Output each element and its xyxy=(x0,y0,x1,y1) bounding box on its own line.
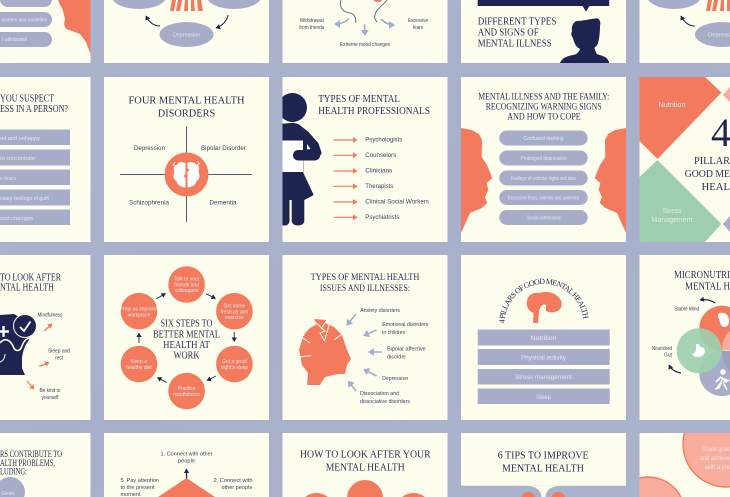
panel: six steps to better mental health at work: Talk to your xyxy=(174,276,200,282)
panel: mental illness and the family: RECOGNIZING WARNING SIGNS xyxy=(486,102,602,112)
panel: 4 pillars of good mental health: Nutrition xyxy=(658,102,686,109)
panel: different types and signs of mental illness: DIFFERENT TYPES xyxy=(478,16,556,27)
panel: what to do if you suspect mental illness: od and unhappy xyxy=(0,136,40,142)
panel: warning signs fragment top left: l withdrawal xyxy=(2,37,27,43)
panel: types of mental health professionals: Counselors xyxy=(365,152,397,159)
panel: types of mental health issues and illnesses: Dissociation and xyxy=(360,391,399,397)
panel: six steps to better mental health at work: HEALTH AT xyxy=(163,340,210,351)
panel: factors contributing to mental health problems fragment: RS CONTRIBUTE TO xyxy=(0,449,62,459)
panel: six steps to better mental health at work: Get some xyxy=(224,304,245,310)
panel: mental illness and the family: Confused thinking xyxy=(524,136,564,142)
panel: what to do if you suspect mental illness xyxy=(0,77,90,242)
panel: how to look after mental health fragment: NTAL HEALTH xyxy=(0,282,54,294)
panel: types of mental health professionals: Clinical Social Workers xyxy=(365,199,430,206)
panel: signs of mood fragment xyxy=(282,0,448,63)
panel: six steps to better mental health at work: exercise xyxy=(225,315,244,321)
panel: types of mental health issues and illnesses: Anxiety disorders xyxy=(360,308,400,314)
panel: 6 tips to improve mental health: 6 TIPS TO IMPROVE xyxy=(498,450,589,462)
panel: types of mental health issues and illnesses: disorder xyxy=(387,354,406,360)
panel: six steps to better mental health at work: healthy diet xyxy=(126,365,152,371)
panel: signs of mood fragment: Excessive xyxy=(408,18,428,24)
panel: six steps to better mental health at work: workplace xyxy=(128,312,150,318)
panel: six steps to better mental health at work: friends and xyxy=(174,282,199,288)
panel: five ways to wellbeing: to the present xyxy=(120,485,155,491)
panel: six steps to better mental health at work: night's sleep xyxy=(221,365,248,371)
panel: six steps to better mental health at work: Help us improve xyxy=(121,306,157,312)
panel: four mental health disorders: Schizophrenia xyxy=(129,200,169,206)
panel: types of mental health professionals: TYPES OF MENTAL xyxy=(318,94,400,105)
panel: 4 pillars arc title: Sleep xyxy=(536,394,551,401)
panel: signs of mood fragment: fears xyxy=(413,25,423,31)
panel: mental illness and the family xyxy=(461,77,626,242)
panel: depression cycle fragment right xyxy=(640,0,730,63)
panel: six steps to better mental health at work xyxy=(104,255,269,420)
panel: types of mental health issues and illnesses: Depression xyxy=(382,376,408,382)
panel: warning signs fragment top left: , worries and anxieties xyxy=(0,18,47,24)
panel: 6 tips to improve mental health: MENTAL HEALTH xyxy=(502,462,584,474)
panel: micronutrients and mental health: Nourished xyxy=(652,346,672,352)
panel: mental illness and the family: Excessive fears, worries and anxieties xyxy=(508,196,579,202)
panel: types of mental health issues and illnesses: ISSUES AND ILLNESSES: xyxy=(320,284,410,294)
panel: mental illness and the family: Feelings of extreme highs and lows xyxy=(511,176,576,182)
panel: types of mental health professionals: Clinicians xyxy=(365,168,393,175)
panel: mental illness and the family: Social withdrawal xyxy=(526,216,560,222)
panel: six steps to better mental health at work: Keep a xyxy=(131,359,147,365)
panel: micronutrients and mental health: Gut xyxy=(664,352,673,358)
panel: how to look after mental health fragment: yourself xyxy=(42,395,59,401)
panel: 4 pillars arc title: Physical activity xyxy=(521,354,567,362)
panel: how to look after your mental health: MENTAL HEALTH xyxy=(326,462,405,474)
panel: four mental health disorders: FOUR MENTAL HEALTH xyxy=(128,96,245,106)
panel: four mental health disorders: DISORDERS xyxy=(158,108,215,120)
panel: what to do if you suspect mental illness: ro concentrate xyxy=(0,156,35,162)
panel: types of mental health issues and illnesses: Emotional disorders xyxy=(382,322,429,328)
panel: five ways to wellbeing: people xyxy=(178,458,195,464)
panel: types of mental health professionals: Psychiatrists xyxy=(365,214,400,221)
panel: six steps to better mental health at work: SIX STEPS TO xyxy=(160,318,212,329)
panel: what to do if you suspect mental illness: ssary feelings of guilt xyxy=(0,196,49,202)
panel: factors contributing to mental health problems fragment: LUDING: xyxy=(0,466,27,476)
panel: five ways to wellbeing: other people xyxy=(222,485,252,491)
panel: four mental health disorders: Depression xyxy=(134,145,165,152)
panel: mental illness and the family: AND HOW TO COPE xyxy=(507,112,581,122)
panel: how to look after mental health fragment: Be kind to xyxy=(40,388,61,394)
panel: micronutrients and mental health: Stable Mind xyxy=(674,306,699,312)
panel: six steps to better mental health at work: colleagues xyxy=(175,288,199,294)
panel: what to do if you suspect mental illness: s fears xyxy=(0,176,16,182)
panel: how to look after mental health fragment: rest xyxy=(55,356,64,362)
panel: 4 pillars arc title: 4 PILLARS OF GOOD MENTAL HEALTH xyxy=(499,278,588,324)
panel: how to look after mental health fragment: TO LOOK AFTER xyxy=(0,272,61,283)
panel: signs of mood fragment: from friends xyxy=(299,25,325,31)
panel: 4 pillars arc title xyxy=(461,255,626,420)
panel: five ways to wellbeing: 2. Connect with xyxy=(214,478,252,484)
panel: types of mental health issues and illnesses: in children xyxy=(382,330,405,336)
panel: 4 pillars arc title: Stress management xyxy=(515,374,572,381)
panel: 4 pillars of good mental health xyxy=(640,77,730,242)
panel: six steps to better mental health at work: WORK xyxy=(174,350,200,362)
panel: five ways to wellbeing: 1. Connect with other xyxy=(160,452,213,458)
panel: what to do if you suspect mental illness: ESS IN A PERSON? xyxy=(0,104,68,115)
panel: four mental health disorders: Dementia xyxy=(210,200,237,206)
panel: what to do if you suspect mental illness: ood changes xyxy=(0,216,33,222)
panel: how to look after your mental health xyxy=(282,433,448,497)
panel: types of mental health issues and illnesses: dissociative disorders xyxy=(360,399,410,405)
panel: five ways to wellbeing: 5. Pay attention xyxy=(120,478,159,484)
panel: different types and signs of mental illness xyxy=(461,0,626,63)
panel: six steps to better mental health at work: fresh air and xyxy=(221,309,249,315)
panel: types of mental health issues and illnesses: TYPES OF MENTAL HEALTH xyxy=(311,273,419,283)
panel: six steps to better mental health at work: Get a good xyxy=(222,359,247,365)
panel: how to look after mental health fragment xyxy=(0,255,90,420)
panel: types of mental health professionals: Psychologists xyxy=(365,137,403,144)
panel: five ways to wellbeing xyxy=(104,433,269,497)
panel: six steps to better mental health at work: mindfulness xyxy=(173,392,200,398)
panel: 4 pillars of good mental health: HEAL xyxy=(702,181,730,193)
panel: how to look after mental health fragment: Mindfulness xyxy=(38,312,63,318)
panel: how to look after your mental health: HOW TO LOOK AFTER YOUR xyxy=(300,448,431,460)
panel: factors contributing to mental health problems fragment: ALTH PROBLEMS, xyxy=(0,458,55,468)
panel: factors contributing to mental health problems fragment xyxy=(0,433,90,497)
panel: types of mental health professionals: HEALTH PROFESSIONALS xyxy=(318,106,430,117)
panel: depression cycle fragment right: Depress xyxy=(708,32,730,38)
panel: how to look after mental health fragment: Sleep and xyxy=(48,348,70,354)
panel: warning signs fragment top left xyxy=(0,0,90,63)
panel: different types and signs of mental illness: MENTAL ILLNESS xyxy=(478,38,552,49)
panel: four mental health disorders: Bipolar Disorder xyxy=(201,145,247,152)
panel: mental illness and the family: Prolonged depression xyxy=(520,156,567,162)
panel: mental illness and the family: MENTAL ILLNESS AND THE FAMILY: xyxy=(478,92,609,102)
panel: 4 pillars of good mental health: Stress xyxy=(662,208,682,215)
panel: what to do if you suspect mental illness: YOU SUSPECT xyxy=(0,93,54,104)
panel: six steps to better mental health at work: BETTER MENTAL xyxy=(153,329,220,340)
panel: track gratitude circles xyxy=(640,433,730,497)
panel: 4 pillars arc title: Nutrition xyxy=(530,335,557,342)
panel: depression cycle fragment: Depression xyxy=(173,32,200,38)
panel: six steps to better mental health at work: Practice xyxy=(178,386,196,392)
panel: micronutrients and mental health xyxy=(640,255,730,420)
panel: types of mental health issues and illnesses xyxy=(282,255,448,420)
panel: factors contributing to mental health problems fragment: Genes xyxy=(2,491,15,497)
panel: types of mental health professionals: Therapists xyxy=(365,183,394,190)
panel: signs of mood fragment: Withdrawal xyxy=(300,18,324,24)
panel: depression cycle fragment xyxy=(104,0,269,63)
panel: 6 tips to improve mental health xyxy=(461,433,626,497)
panel: types of mental health professionals xyxy=(278,77,448,242)
panel: four mental health disorders xyxy=(104,77,269,242)
panel: 4 pillars of good mental health: Management xyxy=(652,217,693,224)
panel: signs of mood fragment: Extreme mood changes xyxy=(340,42,390,48)
panel: different types and signs of mental illness: AND SIGNS OF xyxy=(478,27,539,38)
panel: types of mental health issues and illnesses: Bipolar affective xyxy=(387,346,426,352)
